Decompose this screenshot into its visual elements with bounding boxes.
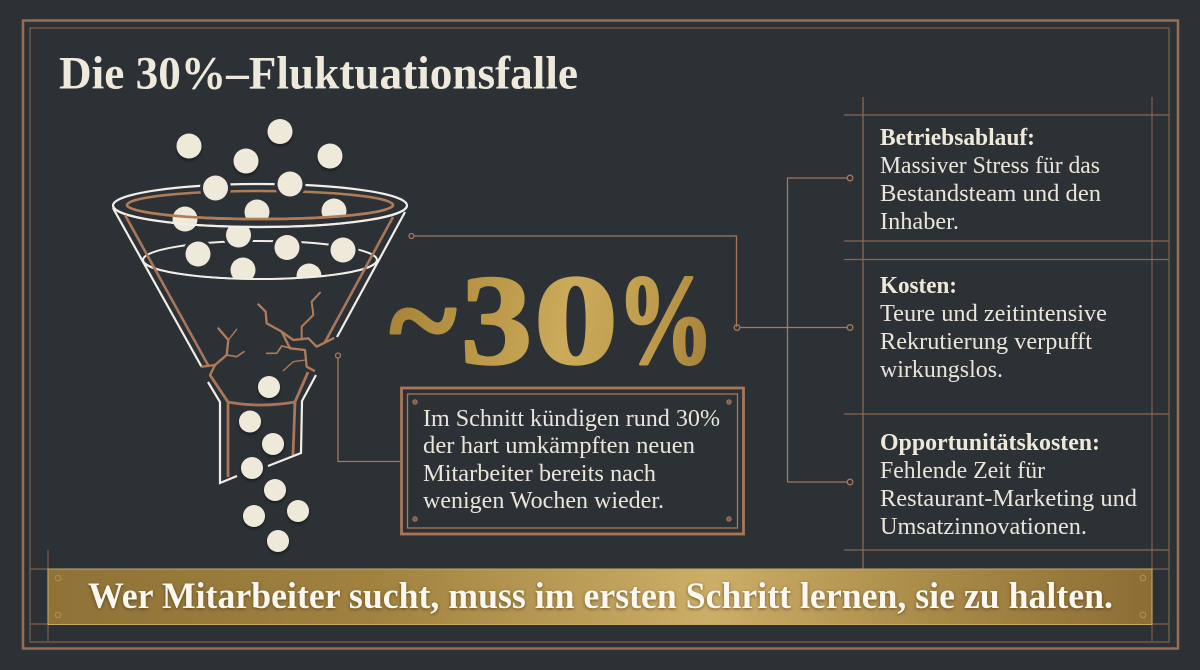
box frame <box>402 388 744 534</box>
balls in spout and below <box>239 376 309 552</box>
falling balls above funnel <box>176 119 342 174</box>
effect: Betriebsablauf <box>880 125 1101 235</box>
bottom banner <box>48 569 1152 624</box>
banner plate <box>48 569 1152 624</box>
effect: Betriebsablauf: Betriebsablauf: <box>880 125 1035 151</box>
big number: ~ <box>390 249 456 391</box>
funnel front rims and walls <box>113 205 407 483</box>
effect: Kosten <box>880 273 1107 383</box>
effect: Kosten: Teure und zeitintensive <box>880 300 1107 327</box>
cracks <box>202 293 333 375</box>
banner rivets <box>55 575 1146 618</box>
connector: funnel to percentage <box>409 234 736 327</box>
box text: der hart umkämpften neuen <box>423 433 695 459</box>
big number: % <box>617 249 714 391</box>
big number: 0 <box>534 249 618 391</box>
big number: 3 <box>461 249 532 391</box>
text box <box>402 388 744 534</box>
connector: percentage to three effects <box>734 175 853 485</box>
balls inside funnel <box>172 172 358 278</box>
effect: Opportunitätskosten: Restaurant-Marketing und <box>880 485 1137 512</box>
box text: Mitarbeiter bereits nach <box>423 461 656 487</box>
funnel back rims <box>113 184 407 279</box>
effect: Kosten: wirkungslos. <box>880 356 1003 383</box>
banner text: Wer Mitarbeiter sucht, muss im ersten Schritt lernen, sie zu halten. <box>88 576 1113 617</box>
effect: Opportunitätskosten: Opportunitätskosten: <box>880 430 1100 456</box>
box text: wenigen Wochen wieder. <box>423 488 664 514</box>
title: Die 30%–Fluktuationsfalle <box>59 48 578 100</box>
effect: Opportunitätskosten: Fehlende Zeit für <box>880 457 1045 484</box>
box rivets <box>413 400 731 521</box>
funnel illustration <box>113 119 407 552</box>
effect: Opportunitätskosten: Umsatzinnovationen. <box>880 513 1087 540</box>
connector: funnel crack to text box <box>336 353 400 462</box>
effect: Betriebsablauf: Bestandsteam und den <box>880 180 1101 207</box>
big number <box>390 249 714 391</box>
right panel rules <box>844 97 1169 570</box>
effect: Kosten: Kosten: <box>880 273 957 299</box>
effect: Betriebsablauf: Inhaber. <box>880 208 959 235</box>
box text: Im Schnitt kündigen rund 30% <box>423 406 720 432</box>
effect: Kosten: Rekrutierung verpufft <box>880 328 1092 355</box>
effect: Betriebsablauf: Massiver Stress für das <box>880 152 1100 179</box>
effect: Opportunitätskosten <box>880 430 1137 540</box>
box text <box>423 406 720 514</box>
